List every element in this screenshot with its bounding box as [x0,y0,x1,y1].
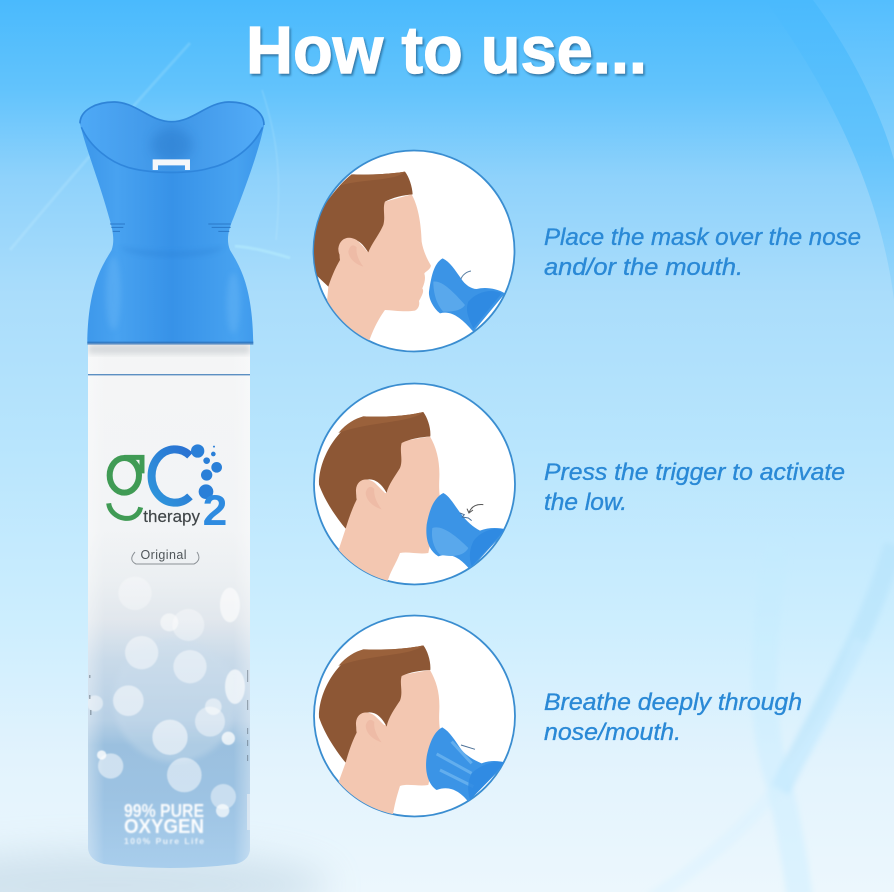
step 3 illustration [314,616,515,818]
logo [109,444,227,535]
hair [319,412,430,529]
mask [426,727,507,802]
ear [356,712,384,727]
step 1 illustration [308,150,514,352]
original badge: Original [140,548,186,562]
mask cap [80,102,264,345]
face [325,194,431,343]
step 3 text: Breathe deeply through [544,689,802,716]
logo: 2 [203,487,227,535]
original badge [132,548,199,564]
face [338,670,440,818]
purity text [124,801,204,846]
step 1 text [544,224,861,281]
step 2 text: the low. [544,489,627,516]
step 2 text [544,459,845,516]
step 2 text: Press the trigger to activate [544,459,845,486]
mask [429,258,505,332]
purity text: 99% PURE [124,801,204,821]
face [338,436,440,585]
step 3 text [544,689,802,746]
hair [308,172,413,287]
step 1 text: and/or the mouth. [544,254,743,281]
step 1 text: Place the mask over the nose [544,224,861,251]
step 2 illustration [314,384,515,585]
purity text: 100% Pure Life [124,836,204,846]
bokeh bubbles [87,577,245,817]
purity text: OXYGEN [124,815,204,838]
can body [87,340,250,870]
title: How to use... [246,13,647,88]
side print marks [89,670,248,761]
mask [426,493,507,570]
oxygen can [80,102,264,870]
ear [338,238,367,255]
logo: therapy [143,507,201,526]
arrow [467,505,483,513]
hair [319,645,430,763]
ear [356,480,385,494]
step 3 text: nose/mouth. [544,719,681,746]
